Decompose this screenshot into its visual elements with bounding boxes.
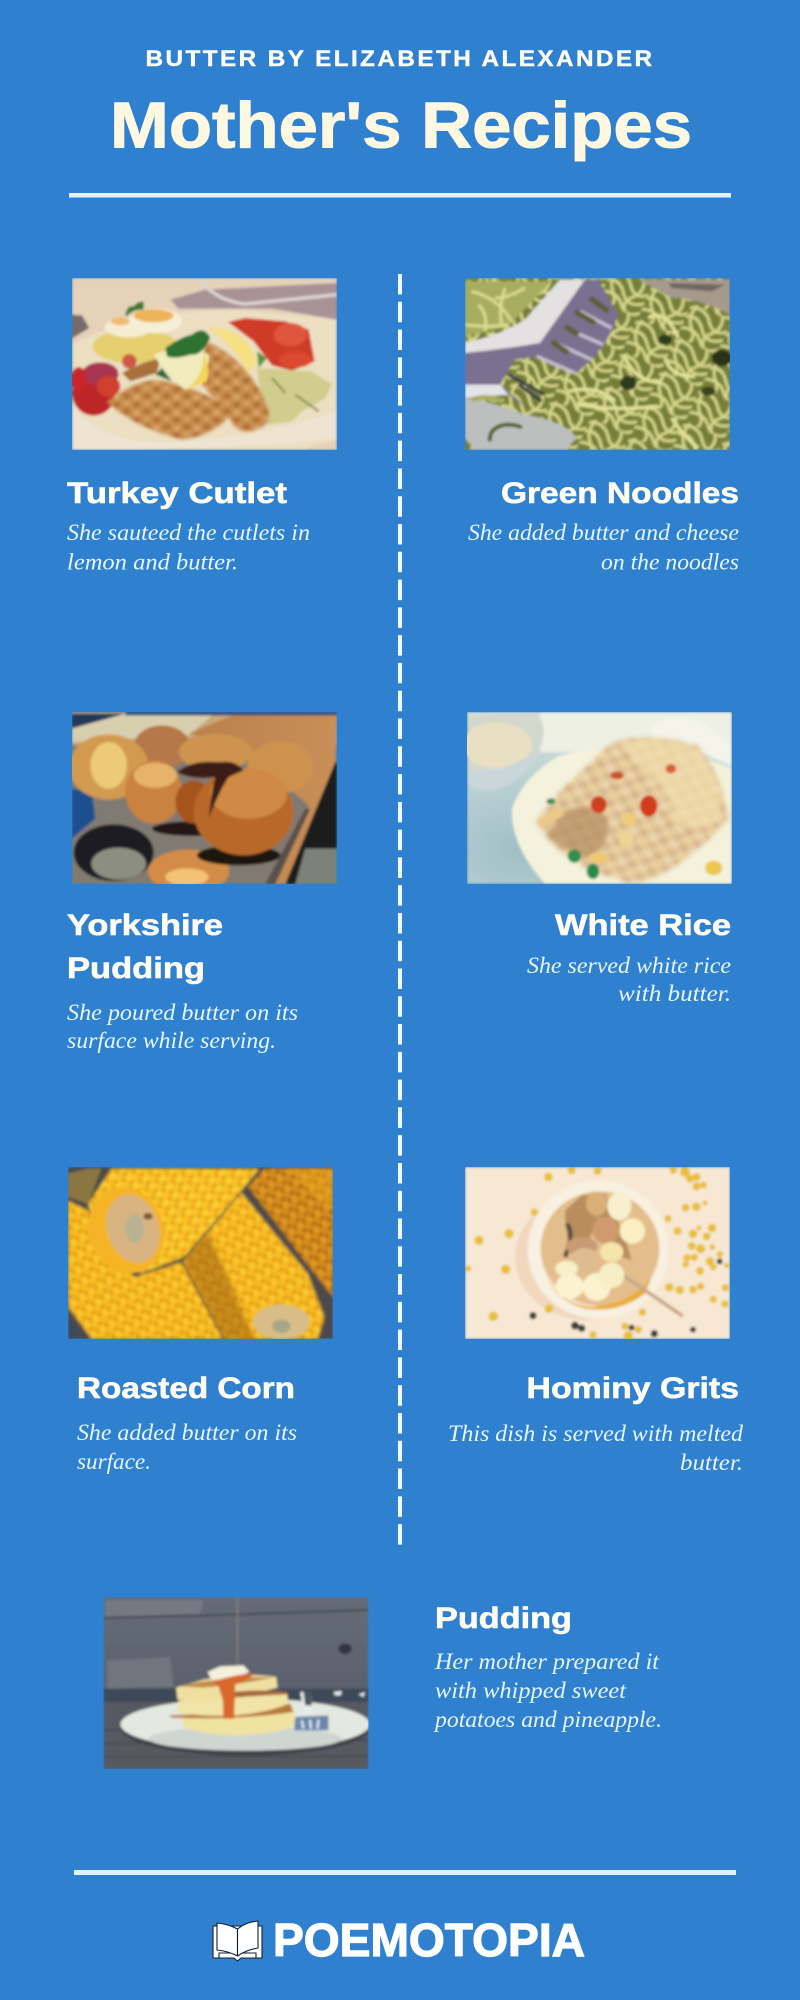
description	[448, 1421, 744, 1475]
description: This dish is served with melted	[448, 1421, 744, 1446]
description: surface while serving.	[67, 1028, 276, 1053]
description	[433, 1649, 662, 1732]
footer logo	[213, 1914, 585, 1966]
subtitle: BUTTER BY ELIZABETH ALEXANDER	[146, 46, 654, 71]
description: butter.	[680, 1450, 743, 1475]
description	[67, 520, 310, 574]
panel: Turkey Cutlet	[67, 278, 337, 574]
icon: open book	[213, 1921, 262, 1961]
description: She added butter on its	[77, 1420, 297, 1445]
description: potatoes and pineapple.	[433, 1707, 662, 1732]
description: She sauteed the cutlets in	[67, 520, 310, 545]
description: Her mother prepared it	[434, 1649, 660, 1674]
photo: green noodles with tongs	[465, 278, 732, 450]
heading: Turkey Cutlet	[67, 477, 287, 510]
description	[77, 1420, 297, 1474]
panel: Pudding	[104, 1597, 662, 1769]
heading: Pudding	[67, 952, 205, 985]
panel: Hominy Grits	[448, 1166, 744, 1475]
heading: Yorkshire	[67, 909, 223, 942]
wordmark: POEMOTOPIA	[273, 1914, 585, 1966]
photo: bowl of grits with banana	[465, 1166, 730, 1340]
centre dashed divider	[398, 274, 402, 1545]
description: She served white rice	[527, 953, 731, 978]
heading: White Rice	[555, 909, 731, 942]
description: with butter.	[618, 981, 731, 1006]
description	[67, 1000, 298, 1053]
top rule	[69, 193, 731, 198]
panel: White Rice	[462, 712, 732, 1006]
heading: Green Noodles	[501, 477, 739, 510]
heading: Pudding	[435, 1602, 572, 1635]
panel: Yorkshire Pudding	[67, 712, 337, 1053]
photo: turkey cutlet plate	[71, 278, 337, 450]
description	[468, 520, 739, 574]
description: She poured butter on its	[67, 1000, 298, 1025]
description	[527, 953, 731, 1006]
description: surface.	[77, 1449, 151, 1474]
description: with whipped sweet	[435, 1678, 627, 1703]
description: on the noodles	[601, 550, 739, 574]
photo: fried rice on white plate	[462, 712, 732, 884]
header	[110, 46, 692, 162]
panel: Green Noodles	[465, 278, 739, 574]
photo: corn on the cob	[68, 1167, 333, 1339]
heading: Hominy Grits	[526, 1372, 739, 1405]
photo: yorkshire puddings on tin	[69, 712, 337, 893]
title: Mother's Recipes	[110, 88, 692, 162]
panel: Roasted Corn	[68, 1167, 333, 1474]
description: lemon and butter.	[67, 550, 238, 574]
heading: Roasted Corn	[77, 1372, 295, 1405]
heading	[67, 909, 223, 985]
bottom rule	[74, 1870, 736, 1875]
photo: stack of pancakes with syrup	[104, 1597, 370, 1769]
description: She added butter and cheese	[468, 520, 739, 545]
